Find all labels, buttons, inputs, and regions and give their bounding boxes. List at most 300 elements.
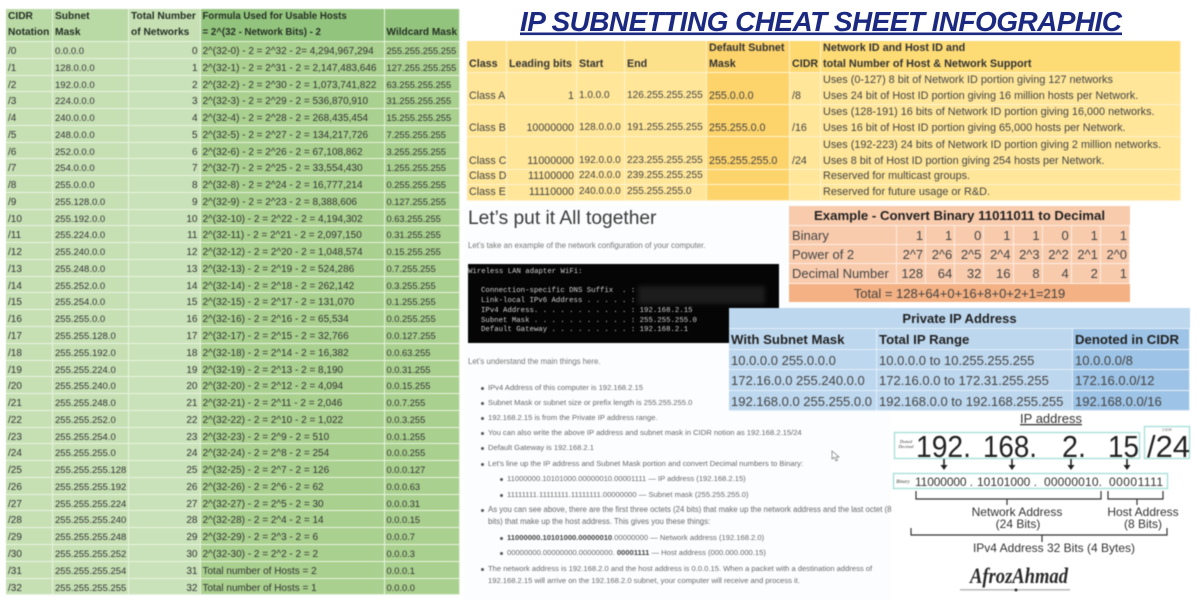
table rows: /0 to /32: 32 [186,582,198,594]
table rows: /0 to /32: /10 [8,214,22,225]
table rows: /0 to /32: 0.0.63.255 [386,348,430,358]
binary box: 11000000 . [915,475,973,489]
decimal number row: 16 [996,266,1010,281]
table rows: /0 to /32: 2^(32-24) - 2 = 2^8 - 2 = 254 [202,448,329,459]
binary box: 10101000 . [977,475,1037,489]
bullet list: The network address is 192.168.2.0 and the host address is 0.0.0.15. When a packet with a destination address of [488,564,872,573]
class table rows: Class C [469,155,506,167]
bracket: network address: Network Address [972,505,1062,519]
table rows: /0 to /32: /26 [8,482,22,493]
decimal number row: 32 [967,266,981,281]
table rows: /0 to /32: 255.0.0.0 [55,180,95,191]
table rows: /0 to /32: 0.31.255.255 [386,230,441,240]
table rows: /0 to /32: 255.254.0.0 [55,297,105,308]
class table rows: Class A [469,90,505,102]
table rows: /0 to /32: 2^(32-5) - 2 = 2^27 - 2 = 134,217,726 [202,130,368,141]
private IP rows: 10.0.0.0/8 [1075,353,1133,368]
class table rows: Uses 16 bit of Host ID portion giving 65,000 hosts per Network. [823,122,1126,134]
table rows: /0 to /32: 27 [186,499,198,510]
table rows: /0 to /32: 255.255.255.255 [386,46,456,56]
table rows: /0 to /32: 21 [186,398,198,409]
table rows: /0 to /32: 0.63.255.255 [386,214,441,224]
table rows: /0 to /32: /7 [8,163,16,174]
terminal screenshot: Wireless LAN adapter WiFi: [468,268,583,276]
bracket: network address [916,491,1101,531]
class table rows: 240.0.0.0 [579,186,621,197]
table rows: /0 to /32: 31.255.255.255 [386,96,451,106]
table header [6,8,460,42]
intro text: Let’s take an example of the network configuration of your computer. [468,241,705,250]
table header: = 2^(32 - Network Bits) - 2 [202,27,321,38]
table rows: /0 to /32: 3 [192,96,198,107]
table rows: /0 to /32: 1.255.255.255 [386,163,446,173]
class table header: Leading bits [509,58,572,70]
table rows: /0 to /32: 8 [192,180,198,191]
class table rows: /8 [792,90,801,102]
class table rows: 255.255.255.0 [709,155,777,167]
heading: Let’s put it All together [468,208,656,229]
binary row: 1 [1120,228,1127,243]
icon: mouse cursor [831,450,840,462]
table rows: /0 to /32: 0.0.0.15 [386,515,420,525]
table rows: /0 to /32: 17 [186,331,198,342]
class table rows: 223.255.255.255 [627,155,703,166]
terminal screenshot: Link-local IPv6 Address . . . . . : [481,297,635,305]
class table rows: Uses 8 bit of Host ID portion giving 254 hosts per Network. [823,155,1104,167]
table rows: /0 to /32: 20 [186,381,198,392]
table rows: /0 to /32: 2^(32-0) - 2 = 2^32 - 2= 4,294,967,294 [202,46,374,57]
private IP heading [729,308,1190,329]
class table rows [466,72,1182,202]
class table header: Network ID and Host ID and [823,42,965,54]
private IP column headers: Denoted in CIDR [1075,332,1179,347]
example heading [789,206,1130,226]
table rows: /0 to /32: 2^(32-13) - 2 = 2^19 - 2 = 524,286 [202,264,354,275]
binary row: 1 [1003,228,1010,243]
private IP heading: Private IP Address [902,311,1017,326]
decimal number row: 2 [1091,266,1098,281]
table rows: /0 to /32: 1 [192,63,198,74]
table rows: /0 to /32: 26 [186,482,198,493]
dotted decimal box: 15 [1108,429,1139,464]
table rows: /0 to /32: /17 [8,331,22,342]
binary row: 0 [1062,228,1069,243]
dotted decimal box: 168. [983,429,1037,464]
table rows: /0 to /32: /4 [8,113,16,124]
table rows: /0 to /32: /30 [8,549,22,560]
table rows: /0 to /32: 2^(32-9) - 2 = 2^23 - 2 = 8,388,606 [202,197,357,208]
title: IP SUBNETTING CHEAT SHEET INFOGRAPHIC [520,6,1123,37]
power of 2 row [788,244,1130,264]
private IP rows: 192.168.0.0/16 [1075,394,1162,409]
panel: let's put it all together [465,205,890,600]
power of 2 row: 2^2 [1048,247,1069,262]
class table rows: 128.0.0.0 [579,122,621,133]
table rows: /0 to /32: 0.0.127.255 [386,331,436,341]
table rows: /0 to /32: /19 [8,365,22,376]
table rows: /0 to /32: 23 [186,432,198,443]
table rows: /0 to /32: 0.0.7.255 [386,398,425,408]
power of 2 row: Power of 2 [792,247,854,262]
table rows: /0 to /32: 255.255.192.0 [55,348,116,359]
table rows: /0 to /32: 255.255.255.224 [55,499,126,510]
table rows: /0 to /32: 0.1.255.255 [386,297,436,307]
table rows: /0 to /32: /2 [8,80,16,91]
class table header: Class [469,58,498,70]
class table rows: Reserved for future usage or R&D. [823,186,990,198]
table rows: /0 to /32: /3 [8,96,16,107]
class table header: total Number of Host & Network Support [823,58,1031,70]
table rows: /0 to /32: 2^(32-18) - 2 = 2^14 - 2 = 16,382 [202,348,349,359]
table rows: /0 to /32: 0.0.0.255 [386,448,425,458]
class table rows: 239.255.255.255 [627,170,703,181]
table: private IP address [728,307,1190,412]
dotted decimal box: 192. [916,429,971,464]
binary row [788,226,1130,246]
table rows: /0 to /32: /20 [8,381,22,392]
table rows: /0 to /32: 255.255.255.255 [55,582,126,594]
power of 2 row: 2^0 [1106,247,1127,262]
table header: Total Number [131,11,196,22]
table header: Formula Used for Usable Hosts [202,11,347,22]
class table rows: 126.255.255.255 [627,90,703,101]
private IP rows: 192.168.0.0 to 192.168.255.255 [879,394,1063,409]
table rows: /0 to /32: 2^(32-27) - 2 = 2^5 - 2 = 30 [202,499,324,510]
table rows: /0 to /32: 2^(32-7) - 2 = 2^25 - 2 = 33,554,430 [202,163,363,174]
table rows: /0 to /32: 240.0.0.0 [55,113,95,124]
table rows: /0 to /32: 2^(32-20) - 2 = 2^12 - 2 = 4,094 [202,381,343,392]
table rows: /0 to /32: /29 [8,532,22,543]
private IP rows: 172.16.0.0/12 [1075,373,1155,388]
class table rows: 10000000 [526,122,574,134]
decimal number row: 128 [901,266,923,281]
table header: Subnet [55,11,90,22]
table rows: /0 to /32: 0.0.0.7 [386,532,415,542]
terminal screenshot [468,264,779,343]
table rows: /0 to /32: 192.0.0.0 [55,80,95,91]
binary row: 0 [974,228,981,243]
table rows: /0 to /32: /14 [8,281,22,292]
class table rows: Class D [469,170,506,182]
bullet list: 11000000.10101000.00000010.00001111 — IP address (192.168.2.15) [507,474,746,483]
table rows: /0 to /32: 248.0.0.0 [55,130,95,141]
bullet list: 11111111.11111111.11111111.00000000 — Subnet mask (255.255.255.0) [507,490,748,499]
table rows: /0 to /32: /1 [8,63,16,74]
table rows: /0 to /32: /27 [8,499,22,510]
example heading: Example - Convert Binary 11011011 to Decimal [814,208,1105,223]
table rows: /0 to /32: 30 [186,549,198,560]
table rows: /0 to /32: 2^(32-1) - 2 = 2^31 - 2 = 2,147,483,646 [202,63,376,74]
table: IP address classes [466,40,1182,202]
table rows: /0 to /32: 0.0.3.255 [386,415,425,425]
terminal screenshot: Connection-specific DNS Suffix . : [481,287,635,295]
table rows: /0 to /32: 15 [186,297,198,308]
table rows: /0 to /32: /28 [8,515,22,526]
table rows: /0 to /32: Total number of Hosts = 1 [202,582,317,594]
class table rows: 1.0.0.0 [579,90,610,101]
table rows: /0 to /32: 0.0.31.255 [386,365,430,375]
table: binary to decimal example [788,206,1131,303]
power of 2 row: 2^7 [903,247,923,262]
table rows: /0 to /32: 0.127.255.255 [386,197,446,207]
decimal number row: 64 [938,266,952,281]
binary row: 1 [945,228,952,243]
table rows: /0 to /32: 2^(32-25) - 2 = 2^7 - 2 = 126 [202,465,329,476]
private IP column headers: Total IP Range [879,332,969,347]
class table header: Start [579,58,603,70]
private IP column headers: With Subnet Mask [731,332,844,347]
decimal number row [788,264,1130,284]
table rows: /0 to /32: /6 [8,147,16,158]
table rows: /0 to /32: 127.255.255.255 [386,63,456,73]
table rows: /0 to /32: /15 [8,297,22,308]
class table rows: 1 [568,90,574,102]
power of 2 row: 2^5 [961,247,981,262]
power of 2 row: 2^1 [1077,247,1098,262]
table rows: /0 to /32: 0.0.0.1 [386,566,415,576]
binary box: Binary [896,480,911,485]
table rows: /0 to /32: 2 [192,80,198,91]
binary row: Binary [792,228,829,243]
class table rows: Class E [469,186,506,198]
class table header [466,40,1182,74]
bullet list [480,383,892,585]
table rows: /0 to /32 [6,41,460,596]
private IP rows: 172.16.0.0 to 172.31.255.255 [879,373,1049,388]
decimal number row: Decimal Number [792,266,889,281]
table rows: /0 to /32: /31 [8,566,22,577]
bullet list: You can also write the above IP address and subnet mask in CIDR notion as 192.168.2.15/24 [488,428,802,437]
table rows: /0 to /32: 255.252.0.0 [55,281,105,292]
table rows: /0 to /32: 0.255.255.255 [386,180,446,190]
table rows: /0 to /32: 252.0.0.0 [55,147,95,158]
logo: AfrozAhmad: AfrozAhmad [968,563,1069,588]
bullet list: Subnet Mask or subnet size or prefix length is 255.255.255.0 [488,398,692,407]
table rows: /0 to /32: 2^(32-21) - 2 = 2^11 - 2 = 2,046 [202,398,342,409]
power of 2 row: 2^6 [932,247,952,262]
binary row: 1 [1091,228,1098,243]
table rows: /0 to /32: 7 [192,163,198,174]
table rows: /0 to /32: 13 [186,264,198,275]
table rows: /0 to /32: 255.255.255.192 [55,482,126,493]
class table rows: 11000000 [527,155,574,167]
table rows: /0 to /32: 2^(32-30) - 2 = 2^2 - 2 = 2 [202,549,318,560]
class table rows: /16 [792,122,807,134]
table header: Wildcard Mask [386,27,457,38]
class table header: Default Subnet [709,42,784,54]
binary box: 00000010. [1044,475,1102,489]
table rows: /0 to /32: 128.0.0.0 [55,63,95,74]
table rows: /0 to /32: 9 [192,197,198,208]
table: CIDR subnet reference [6,8,460,596]
private IP rows: 172.16.0.0 255.240.0.0 [731,373,865,388]
bullet list: Let’s line up the IP address and Subnet Mask portion and convert Decimal numbers to Binary: [488,459,803,468]
table rows: /0 to /32: 0.0.0.0 [386,582,415,592]
table rows: /0 to /32: 255.224.0.0 [55,230,105,241]
table rows: /0 to /32: 0 [192,46,198,57]
class table rows: 255.255.255.0 [627,186,692,197]
private IP column headers [728,328,1190,350]
class table rows: 11110000 [529,186,574,198]
CIDR box: /24 [1147,429,1190,464]
bullet list: 11000000.10101000.00000010.00000000 — Network address (192.168.2.0) [507,533,764,542]
binary box [894,474,1168,489]
class table rows: Class B [469,122,506,134]
table rows: /0 to /32: /5 [8,130,16,141]
table rows: /0 to /32: 22 [186,415,198,426]
table rows: /0 to /32: 2^(32-2) - 2 = 2^30 - 2 = 1,073,741,822 [202,80,376,91]
bracket: host address [1107,491,1179,531]
table rows: /0 to /32: 255.255.255.252 [55,549,126,560]
table rows: /0 to /32: 254.0.0.0 [55,163,95,174]
CIDR box: CIDR [1162,427,1172,432]
table rows: /0 to /32: 2^(32-4) - 2 = 2^28 - 2 = 268,435,454 [202,113,368,124]
binary row: 1 [1032,228,1040,243]
decimal number row: 8 [1032,266,1040,281]
table rows: /0 to /32: 255.255.252.0 [55,415,116,426]
table rows: /0 to /32: /8 [8,180,16,191]
table header: CIDR [8,11,33,22]
table rows: /0 to /32: 255.255.248.0 [55,398,116,409]
decimal number row: 1 [1120,266,1127,281]
table rows: /0 to /32: 2^(32-16) - 2 = 2^16 - 2 = 65,534 [202,314,349,325]
dotted decimal box [894,429,1140,464]
dotted decimal box: Decimal [897,444,914,449]
table rows: /0 to /32: 2^(32-3) - 2 = 2^29 - 2 = 536,870,910 [202,96,368,107]
class table rows: 192.0.0.0 [579,155,621,166]
bracket: network address: (24 Bits) [996,517,1040,531]
binary row: 1 [916,228,923,243]
table rows: /0 to /32: 255.255.254.0 [55,432,116,443]
table rows: /0 to /32: /21 [8,398,22,409]
table rows: /0 to /32: 16 [186,314,198,325]
table rows: /0 to /32: 18 [186,348,198,359]
table rows: /0 to /32: 255.255.0.0 [55,314,105,325]
table rows: /0 to /32: 14 [186,281,198,292]
table header: of Networks [131,27,189,38]
table rows: /0 to /32: 2^(32-6) - 2 = 2^26 - 2 = 67,108,862 [202,147,363,158]
table rows: /0 to /32: 6 [192,147,198,158]
bracket: IPv4 address: IPv4 Address 32 Bits (4 Bytes) [973,541,1135,555]
bullet list: 192.168.2.15 will arrive on the 192.168.2.0 subnet, your computer will receive and process it. [488,576,800,585]
class table rows: Uses 24 bit of Host ID portion giving 16 million hosts per Network. [823,90,1138,102]
table rows: /0 to /32: 255.255.240.0 [55,381,116,392]
table rows: /0 to /32: 2^(32-28) - 2 = 2^4 - 2 = 14 [202,515,324,526]
dotted decimal box: 2. [1062,429,1086,464]
table rows: /0 to /32: /12 [8,247,22,258]
table rows: /0 to /32: Total number of Hosts = 2 [202,566,317,577]
class table rows: /24 [792,155,807,167]
class table header: End [627,58,647,70]
table rows: /0 to /32: /25 [8,465,22,476]
table rows: /0 to /32: 255.128.0.0 [55,197,105,208]
private IP rows: 10.0.0.0 to 10.255.255.255 [879,353,1034,368]
table rows: /0 to /32: 255.255.224.0 [55,365,116,376]
table rows: /0 to /32: /0 [8,46,16,57]
table rows: /0 to /32: 31 [186,566,198,577]
table rows: /0 to /32: 28 [186,515,198,526]
dotted decimal box: Dotted [899,439,913,444]
table rows: /0 to /32: /24 [8,448,22,459]
table rows: /0 to /32: 29 [186,532,198,543]
table rows: /0 to /32: 2^(32-15) - 2 = 2^17 - 2 = 131,070 [202,297,354,308]
bracket: host address: (8 Bits) [1124,517,1162,531]
table rows: /0 to /32: 0.0.15.255 [386,381,430,391]
total row [789,284,1130,302]
table rows: /0 to /32: 11 [187,230,198,241]
private IP rows: 10.0.0.0 255.0.0.0 [731,353,836,368]
table rows: /0 to /32: /32 [8,582,22,594]
table rows: /0 to /32: 15.255.255.255 [386,113,451,123]
bullet list: 00000000.00000000.00000000. 00001111 — Host address (000.000.000.15) [507,548,766,557]
class table rows: Reserved for multicast groups. [823,170,970,182]
table rows: /0 to /32: 224.0.0.0 [55,96,95,107]
private IP rows [728,350,1190,412]
diagram: IPv4 address breakdown [892,411,1191,592]
table rows: /0 to /32: 2^(32-19) - 2 = 2^13 - 2 = 8,190 [202,365,343,376]
power of 2 row: 2^4 [990,247,1010,262]
table rows: /0 to /32: 0.0.0.0 [55,46,84,57]
table rows: /0 to /32: 0.3.255.255 [386,281,436,291]
table rows: /0 to /32: 2^(32-26) - 2 = 2^6 - 2 = 62 [202,482,324,493]
class table rows: 255.0.0.0 [709,90,754,102]
table rows: /0 to /32: 0.0.0.31 [386,499,420,509]
table rows: /0 to /32: /18 [8,348,22,359]
table rows: /0 to /32: 255.255.255.128 [55,465,126,476]
class table rows: 11100000 [528,170,574,182]
table rows: /0 to /32: 2^(32-23) - 2 = 2^9 - 2 = 510 [202,432,329,443]
table header: Notation [8,27,49,38]
table rows: /0 to /32: 63.255.255.255 [386,80,451,90]
table rows: /0 to /32: /16 [8,314,22,325]
table rows: /0 to /32: 255.255.255.248 [55,532,126,543]
class table rows: Uses (192-223) 24 bits of Network ID portion giving 2 million networks. [823,139,1161,151]
table rows: /0 to /32: 2^(32-8) - 2 = 2^24 - 2 = 16,777,214 [202,180,363,191]
table rows: /0 to /32: 0.7.255.255 [386,264,436,274]
table rows: /0 to /32: 2^(32-22) - 2 = 2^10 - 2 = 1,022 [202,415,343,426]
table header: Mask [55,27,80,38]
table rows: /0 to /32: 25 [186,465,198,476]
total row: Total = 128+64+0+16+8+0+2+1=219 [854,286,1065,301]
table rows: /0 to /32: 4 [192,113,198,124]
arrows [940,459,1130,470]
private IP rows: 192.168.0.0 255.255.0.0 [731,394,872,409]
binary box: 00001111 [1109,475,1163,489]
diagram heading: IP address [1020,411,1082,426]
table rows: /0 to /32: 255.255.255.0 [55,448,116,459]
class table rows: 255.255.0.0 [709,122,765,134]
table rows: /0 to /32: 255.255.128.0 [55,331,116,342]
bullet list: As you can see above, there are the first three octets (24 bits) that make up the network address and the last octet (8 [488,505,892,514]
table rows: /0 to /32: /22 [8,415,22,426]
class table header: CIDR [792,58,818,70]
class table rows: 191.255.255.255 [627,122,703,133]
bracket: IPv4 address [911,528,1167,555]
table rows: /0 to /32: 2^(32-11) - 2 = 2^21 - 2 = 2,097,150 [202,230,362,241]
bullet list: bits) that make up the host address. This gives you these things: [488,517,710,526]
table rows: /0 to /32: 19 [186,365,198,376]
table rows: /0 to /32: 5 [192,130,198,141]
table rows: /0 to /32: 0.0.0.3 [386,549,415,559]
table rows: /0 to /32: 3.255.255.255 [386,147,446,157]
table rows: /0 to /32: 7.255.255.255 [386,130,446,140]
power of 2 row: 2^3 [1019,247,1040,262]
bullet list: IPv4 Address of this computer is 192.168.2.15 [488,383,643,392]
class table rows: Uses (0-127) 8 bit of Network ID portion giving 127 networks [823,74,1113,86]
class table rows: 224.0.0.0 [579,170,621,181]
text: main things: Let’s understand the main things here. [468,357,600,366]
table rows: /0 to /32: 255.255.255.254 [55,566,126,577]
